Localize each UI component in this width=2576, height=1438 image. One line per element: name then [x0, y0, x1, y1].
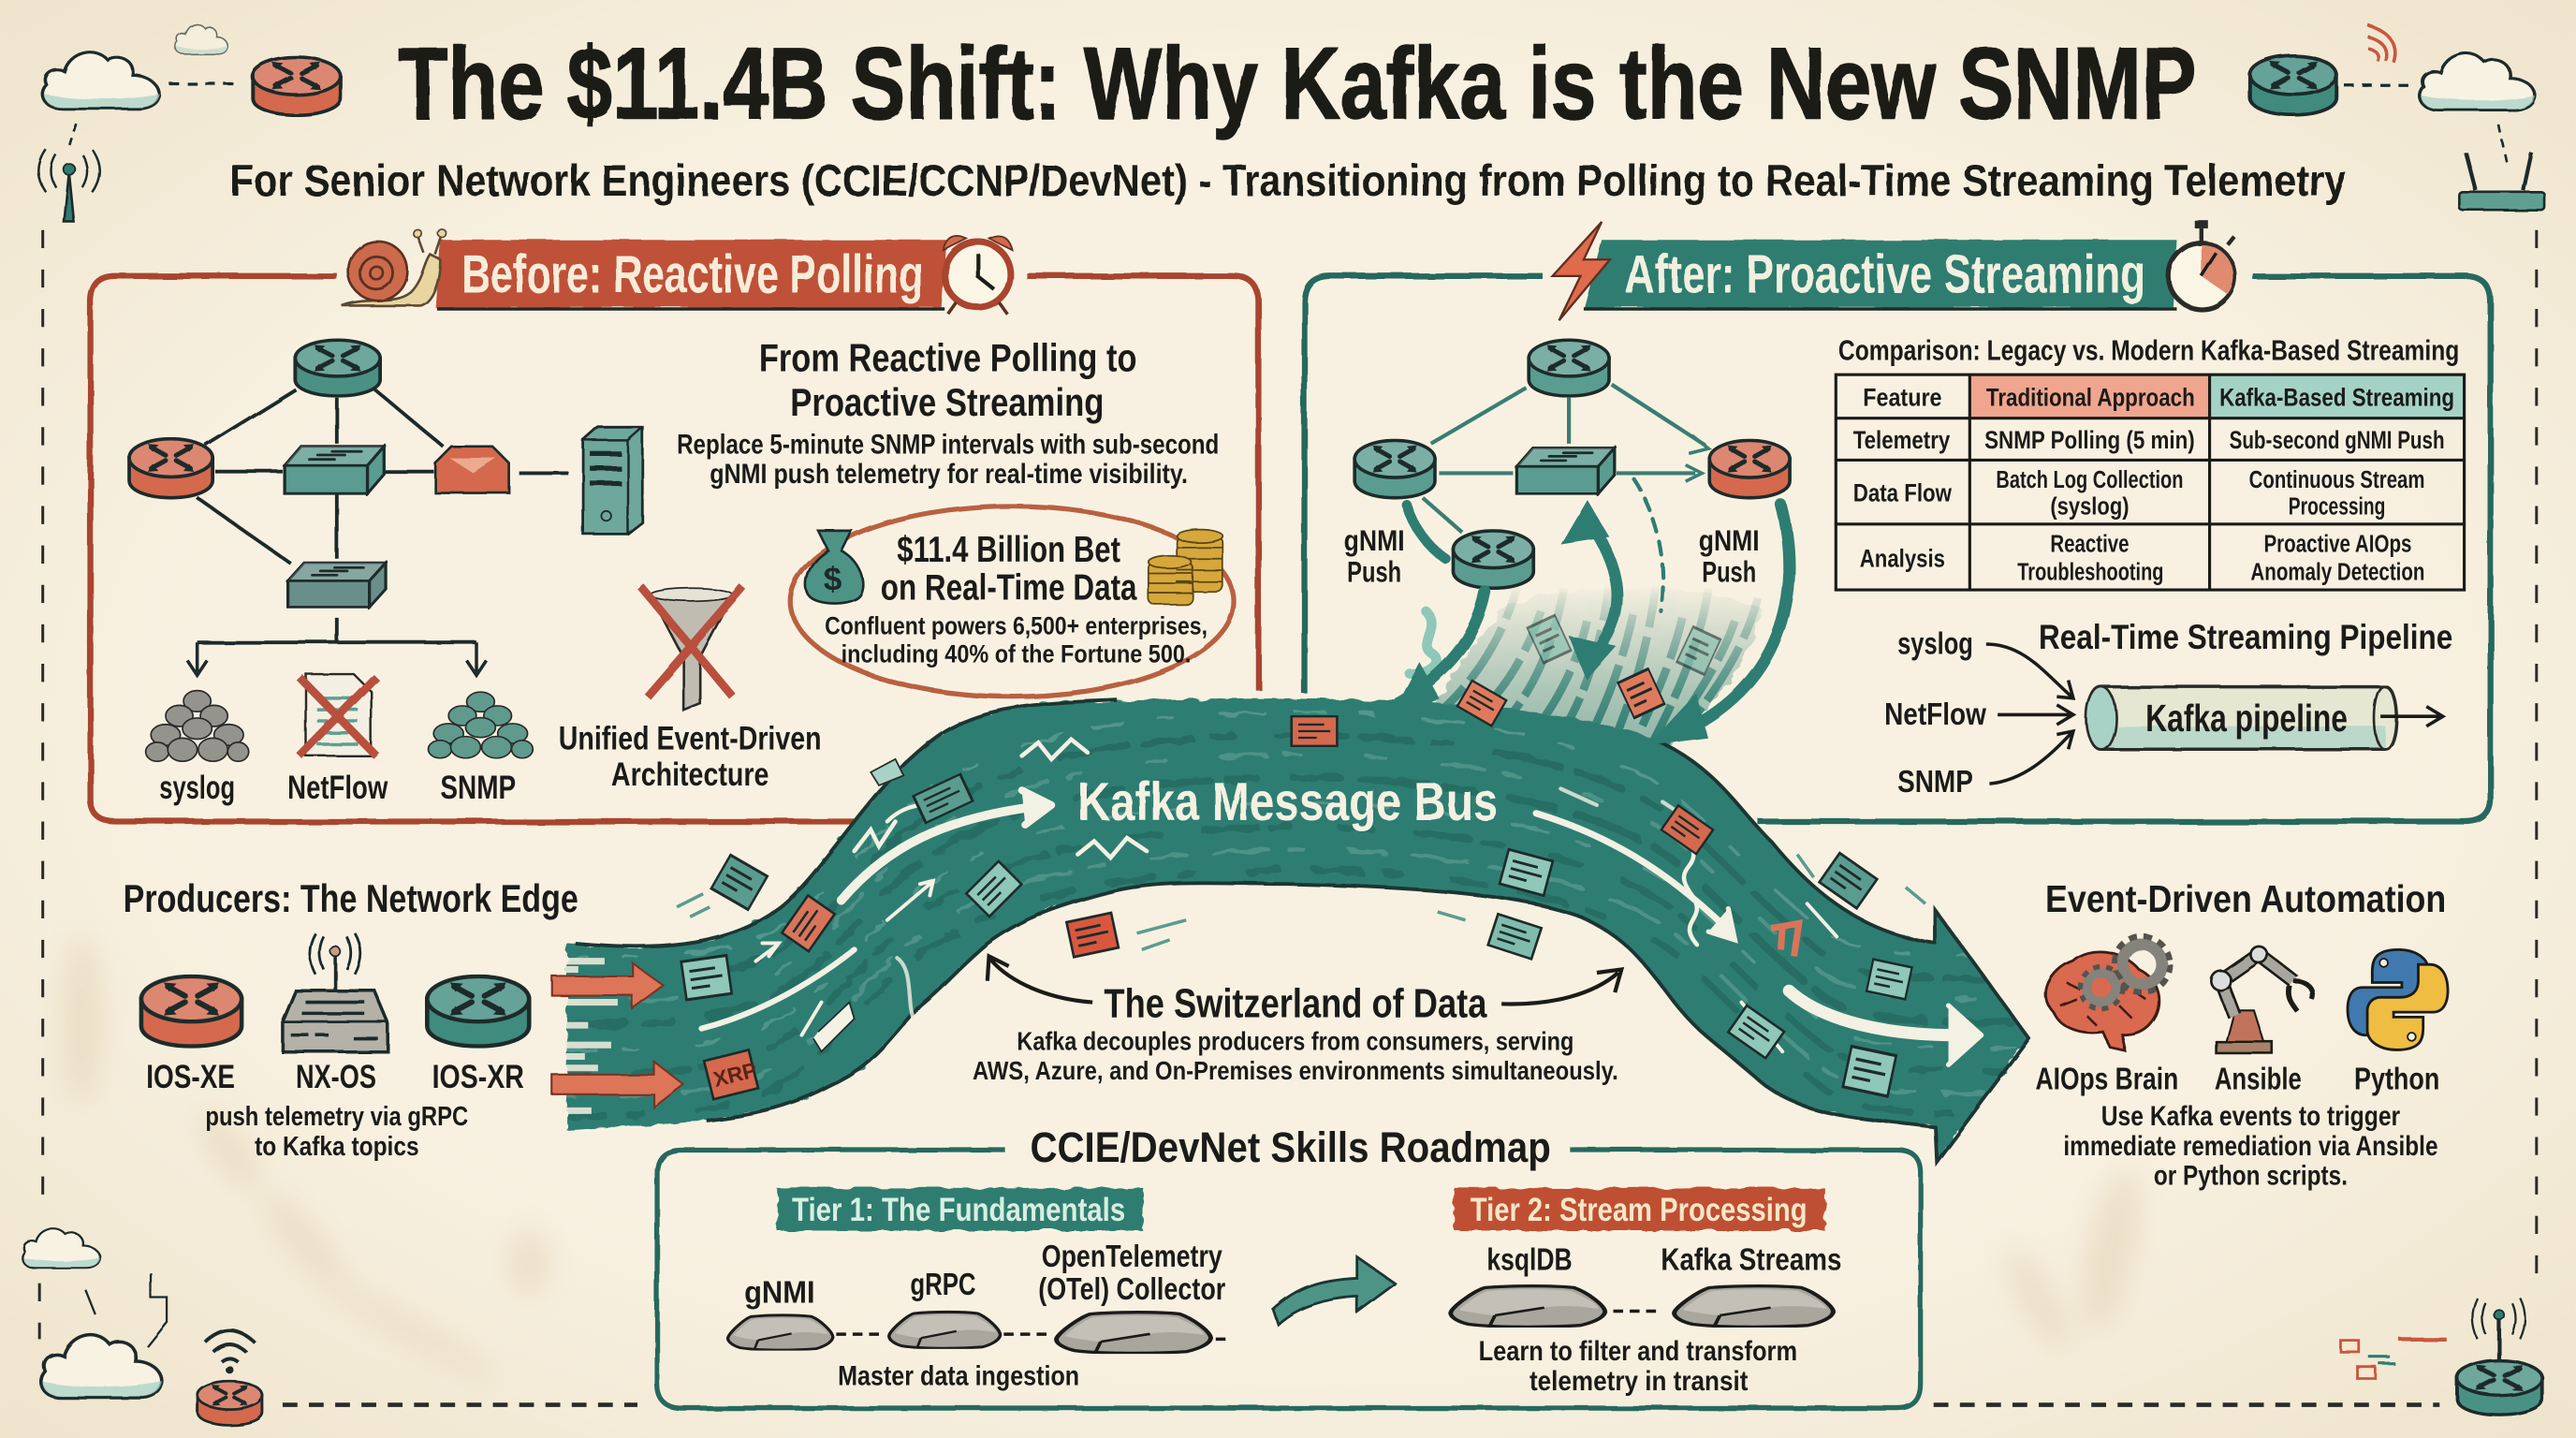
- tier 2 labels: Kafka Streams: [1661, 1243, 1841, 1278]
- heading: from reactive to proactive: [759, 336, 1137, 424]
- table row: telemetry: Telemetry: [1853, 425, 1950, 454]
- text: unified architecture: Architecture: [611, 756, 768, 793]
- border dashes: [39, 230, 2537, 1405]
- banner: tier 1: Tier 1: The Fundamentals: [792, 1192, 1125, 1228]
- arrow: tier 1 to tier 2: [1273, 1257, 1395, 1325]
- thick push arrows into the bus: [1395, 478, 1789, 742]
- table row: analysis: [1860, 530, 2424, 586]
- text: master ingestion: Master data ingestion: [838, 1360, 1079, 1391]
- router: top: [295, 340, 380, 396]
- diagram: pipeline: NetFlow: [1884, 697, 1986, 732]
- heading: roadmap: CCIE/DevNet Skills Roadmap: [1030, 1123, 1551, 1171]
- labels: automation tools: Python: [2354, 1063, 2439, 1097]
- text: decouples: AWS, Azure, and On-Premises environments simultaneously.: [973, 1056, 1618, 1085]
- icon: IOS-XE router: [141, 976, 242, 1047]
- device: firewall: [435, 447, 509, 493]
- text: billion bet: $11.4 Billion Bet: [897, 530, 1120, 570]
- heading: producers: Producers: The Network Edge: [124, 876, 578, 920]
- labels: automation tools: AIOps Brain: [2036, 1063, 2178, 1097]
- corner decoration: bottom right network: [2341, 1298, 2542, 1415]
- table row: analysis: Reactive: [2050, 530, 2130, 558]
- label: kafka message bus: Kafka Message Bus: [1077, 772, 1499, 832]
- section: event-driven automation: [2036, 877, 2448, 1191]
- subtitle: For Senior Network Engineers (CCIE/CCNP/DevNet) - Transitioning from Polling to Real-Time Streaming Telemetry: [230, 156, 2347, 206]
- table row: data flow: Continuous Stream: [2249, 465, 2424, 493]
- packets floating near the river: [677, 759, 1925, 959]
- text: replace SNMP intervals: [677, 429, 1219, 490]
- label: gNMI push right: Push: [1702, 554, 1756, 588]
- text: decouples: [973, 1026, 1618, 1085]
- tier 2 labels: ksqlDB: [1486, 1243, 1573, 1278]
- banner: after: After: Proactive Streaming: [1625, 244, 2145, 304]
- router: lower: [1453, 531, 1533, 588]
- callout: billion bet: [790, 506, 1234, 697]
- text: learn to filter: telemetry in transit: [1530, 1366, 1748, 1397]
- diagram: pipeline: [1884, 627, 2443, 800]
- diagram: legacy network: [129, 340, 642, 675]
- table row: header: Feature: [1863, 382, 1942, 411]
- tier 1 stepping stones: [690, 1312, 1251, 1353]
- icon: money bag: $: [823, 561, 842, 597]
- table row: analysis: Troubleshooting: [2017, 558, 2163, 586]
- banner: before: [435, 240, 946, 309]
- text: learn to filter: [1479, 1336, 1797, 1397]
- text: replace SNMP intervals: gNMI push telemetry for real-time visibility.: [710, 459, 1188, 490]
- section: producers: [124, 876, 683, 1162]
- icon: ansible robot arm: [2211, 946, 2312, 1053]
- table row: data flow: Batch Log Collection: [1996, 465, 2183, 493]
- kafka cylinder: [2086, 687, 2396, 749]
- tier 1 labels: OpenTelemetry: [1042, 1240, 1222, 1274]
- pipeline input arrows: [1986, 644, 2073, 784]
- diagram: pipeline: SNMP: [1897, 765, 1973, 800]
- icon: snail: [342, 229, 446, 305]
- heading: pipeline: Real-Time Streaming Pipeline: [2039, 618, 2452, 656]
- table row: data flow: Processing: [2289, 492, 2385, 520]
- heading: automation: Event-Driven Automation: [2045, 877, 2446, 920]
- arrow: to consumers: [1501, 969, 1621, 1004]
- heading: switzerland: The Switzerland of Data: [1104, 980, 1487, 1026]
- router: top: [1529, 340, 1609, 396]
- text: push telemetry: to Kafka topics: [255, 1132, 419, 1162]
- table row: analysis: Analysis: [1860, 543, 1945, 572]
- table header fills: [1969, 374, 2210, 418]
- text: learn to filter: Learn to filter and transform: [1479, 1336, 1797, 1367]
- panel: skills roadmap: [657, 1123, 1921, 1408]
- label: NX-OS: NX-OS: [296, 1059, 376, 1095]
- label: IOS-XR: IOS-XR: [432, 1059, 524, 1095]
- icon: IOS-XR router: [427, 976, 529, 1047]
- collector box: [288, 563, 386, 607]
- panel frame: after: [1305, 276, 2491, 822]
- heading: from reactive to proactive: Proactive Streaming: [790, 380, 1104, 424]
- table row: header: Kafka-Based Streaming: [2219, 382, 2454, 411]
- text: confluent stats: Confluent powers 6,500+ enterprises,: [825, 610, 1208, 639]
- panel frame: roadmap: [657, 1151, 1921, 1408]
- icon: NX-OS switch: [283, 933, 388, 1051]
- router: left: [1354, 440, 1435, 498]
- label: IOS-XE: IOS-XE: [146, 1059, 235, 1095]
- text: use kafka events: immediate remediation via Ansible: [2063, 1131, 2438, 1162]
- flow arrows on the river: [701, 740, 1982, 1064]
- waterfall into the bus: [1410, 579, 1761, 748]
- text: push telemetry: [205, 1102, 468, 1162]
- table row: data flow: Data Flow: [1853, 477, 1953, 506]
- table row: telemetry: SNMP Polling (5 min): [1984, 425, 2195, 454]
- icon: python logo: [2348, 949, 2448, 1049]
- corner decoration: top right network: [2250, 24, 2545, 211]
- diagram: streaming network: [1354, 340, 1790, 588]
- icon: crossed-out funnel: [641, 587, 742, 710]
- tier 1 labels: (OTel) Collector: [1038, 1272, 1225, 1307]
- server: [583, 427, 642, 534]
- arrow: producer one: [552, 962, 664, 1009]
- router: right: [1709, 440, 1790, 498]
- tier 1 labels: gRPC: [910, 1268, 976, 1302]
- pipeline output arrow: [2380, 707, 2443, 726]
- label: SNMP: SNMP: [440, 770, 516, 806]
- text: unified architecture: [559, 720, 822, 793]
- down arrows: [187, 642, 487, 675]
- label: gNMI push right: [1699, 523, 1760, 588]
- icon: SNMP pile: [429, 692, 533, 758]
- icon: money bag: [806, 531, 863, 604]
- text: use kafka events: [2063, 1101, 2438, 1191]
- network links: [198, 389, 568, 642]
- panel frame: before: [91, 276, 1258, 822]
- packets on the river: [681, 668, 1912, 1099]
- icon: alarm clock: [943, 236, 1012, 314]
- table row: data flow: (syslog): [2050, 492, 2130, 520]
- pipeline labels: syslog: [1897, 627, 1973, 662]
- table row: header: [1863, 382, 2454, 411]
- icon: lightning: [1553, 222, 1610, 320]
- arrow: producer two: [552, 1062, 683, 1108]
- text: unified architecture: Unified Event-Driven: [559, 720, 822, 756]
- comparison table: [1836, 374, 2465, 590]
- text: use kafka events: Use Kafka events to trigger: [2101, 1101, 2400, 1132]
- table grid: [1836, 374, 2465, 590]
- icon: AIOps brain: [2046, 936, 2170, 1051]
- labels: automation tools: Ansible: [2215, 1063, 2302, 1097]
- label: gNMI push left: Push: [1347, 554, 1401, 588]
- river body: [559, 698, 2029, 1162]
- table row: telemetry: [1853, 425, 2445, 454]
- label: syslog: syslog: [159, 770, 235, 806]
- callout: switzerland of data: [973, 956, 1621, 1085]
- label: gNMI push left: gNMI: [1344, 523, 1405, 557]
- river ink edges: [575, 700, 2029, 1162]
- table row: telemetry: Sub-second gNMI Push: [2230, 425, 2445, 454]
- tier 2 labels: [1486, 1243, 1841, 1278]
- labels: automation tools: [2036, 1063, 2439, 1097]
- kafka message bus river: [559, 579, 2029, 1162]
- callout: billion bet: on Real-Time Data: [881, 568, 1137, 609]
- text: use kafka events: or Python scripts.: [2154, 1160, 2348, 1191]
- label: gNMI push right: gNMI: [1699, 523, 1760, 557]
- icon: stopwatch: [2169, 220, 2234, 309]
- router: left: [129, 439, 212, 498]
- heading: from reactive to proactive: From Reactive Polling to: [759, 336, 1137, 380]
- banner: tier 2: Tier 2: Stream Processing: [1471, 1192, 1808, 1228]
- label: kafka pipeline: Kafka pipeline: [2145, 697, 2348, 740]
- icon: crossed-out NetFlow document: [299, 674, 376, 756]
- icon: coins: [1149, 529, 1222, 605]
- arrow: to producers: [988, 956, 1092, 1003]
- table row: data flow: [1853, 465, 2424, 520]
- tier 1 labels: gNMI: [744, 1276, 815, 1311]
- label: gNMI push left: [1344, 523, 1405, 588]
- network links: [1423, 385, 1705, 533]
- corner decoration: bottom left network: [22, 1229, 262, 1425]
- icon: syslog pile: [146, 691, 249, 761]
- banner: before: Before: Reactive Polling: [461, 244, 923, 304]
- text: push telemetry: push telemetry via gRPC: [205, 1102, 468, 1132]
- tier 2 stepping stones: [1398, 1286, 1882, 1327]
- packets on the river: XRP: [710, 1057, 759, 1092]
- text: decouples: Kafka decouples producers from consumers, serving: [1017, 1026, 1573, 1055]
- table row: analysis: Anomaly Detection: [2250, 558, 2424, 586]
- callout oval: [790, 506, 1234, 697]
- text: replace SNMP intervals: Replace 5-minute SNMP intervals with sub-second: [677, 429, 1219, 460]
- switch: centre: [1516, 448, 1615, 493]
- banner: after: [1584, 240, 2176, 309]
- frayed left end of the river: [562, 961, 624, 1110]
- label: NetFlow: NetFlow: [287, 770, 388, 806]
- panel: before: [91, 229, 1258, 822]
- switch: centre: [285, 447, 384, 493]
- table row: analysis: Proactive AIOps: [2263, 530, 2411, 558]
- table row: header: Traditional Approach: [1986, 382, 2195, 411]
- callout: billion bet: including 40% of the Fortune 500.: [842, 638, 1191, 668]
- panel: after: [1305, 220, 2491, 822]
- title: The $11.4B Shift: Why Kafka is the New SNMP: [398, 26, 2197, 140]
- corner decoration: top left network: [38, 24, 341, 222]
- tier 1 labels: [744, 1240, 1225, 1311]
